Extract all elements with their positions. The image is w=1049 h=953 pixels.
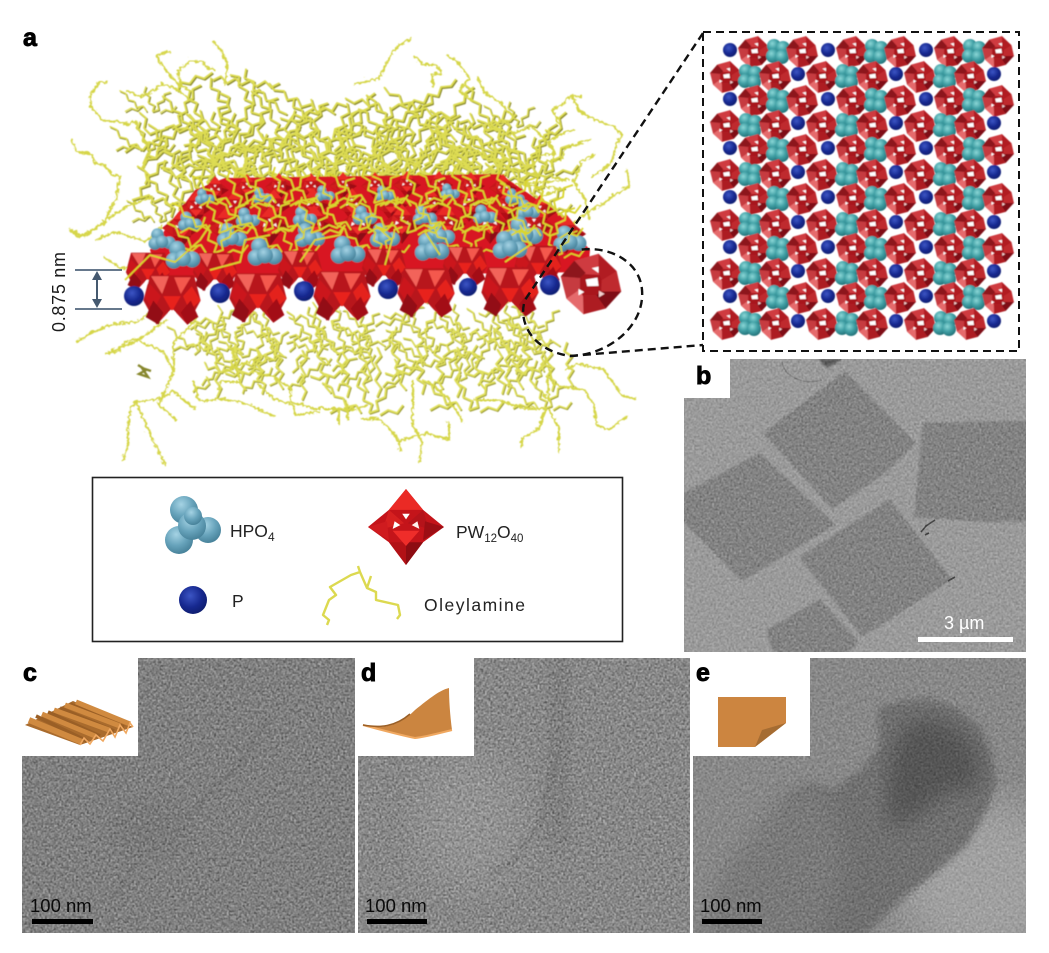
lower oleylamine cloud [167, 298, 574, 416]
scale bar d: 100 nm [365, 895, 427, 916]
icon: HPO4 cluster [165, 496, 221, 554]
label b: b [696, 362, 711, 390]
panel b: TEM of square sheets [680, 359, 1030, 655]
chains crossing front row [125, 222, 530, 280]
panel e: TEM folded sheet [693, 658, 1026, 933]
back rows of polyoxometalates [162, 171, 586, 254]
scale bar e: 100 nm [700, 895, 762, 916]
zoom dashed callout [523, 33, 703, 356]
scale bar b [918, 613, 1013, 642]
outlying oleylamine chains [68, 38, 633, 463]
dark knot of chain [138, 365, 151, 377]
label: PW12O40: O [497, 522, 511, 542]
icon: curved sheet [363, 688, 452, 738]
teal HPO4 clusters in slab [148, 184, 586, 252]
label a: a [23, 24, 38, 52]
upper oleylamine cloud [110, 63, 579, 230]
icon: folded-corner sheet [718, 697, 786, 747]
front row of polyoxometalates [143, 246, 629, 325]
scale bar c: 100 nm [30, 895, 92, 916]
panel d: TEM curved sheet [358, 658, 690, 933]
label c: c [23, 659, 37, 687]
icon: corrugated sheet [25, 701, 133, 745]
label: PW12O40: 12 [484, 533, 497, 545]
label: Oleylamine: Oleylamine [424, 595, 525, 615]
thickness bracket: 0.875 nm: 0.875 nm [49, 252, 69, 332]
second row of polyoxometalates [126, 231, 561, 291]
label d: d [361, 659, 376, 687]
label: PW12O40: 40 [511, 533, 523, 545]
panel a: molecular model [68, 38, 633, 463]
thickness bracket: 0.875 nm [49, 252, 122, 332]
inset: top-down lattice [703, 32, 1019, 351]
icon: PW12O40 [368, 489, 444, 565]
icon: oleylamine chain [323, 566, 400, 625]
sparse chains over slab [167, 167, 585, 258]
legend box [92, 478, 622, 642]
label: PW12O40: PW [456, 522, 484, 542]
scale bar b: 3 µm [944, 613, 984, 633]
phosphorus spheres [124, 275, 560, 306]
icon: P sphere [179, 586, 207, 614]
label e: e [696, 659, 710, 687]
label: P: P [232, 591, 244, 611]
red inorganic slab base [150, 174, 590, 278]
panel c: TEM wrinkled sheet [22, 658, 355, 933]
label: HPO4: HPO [230, 521, 268, 541]
label: HPO4: 4 [268, 530, 275, 544]
